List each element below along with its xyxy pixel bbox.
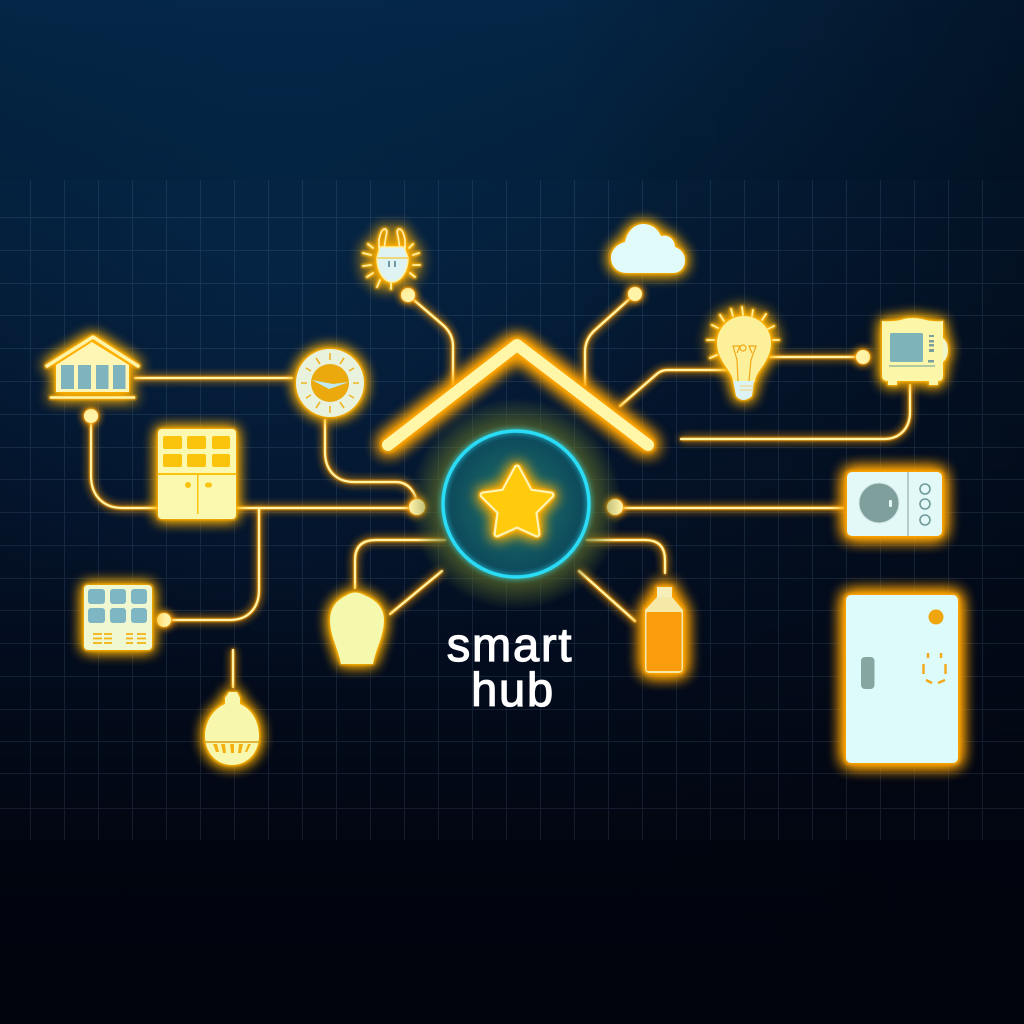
label: smart hub: smart: [447, 618, 573, 671]
connector lines: [91, 294, 910, 687]
icon: bottle: [645, 587, 683, 673]
icon: jar lamp: [330, 592, 384, 664]
hub ring: [443, 431, 589, 577]
icon: microwave oven: [882, 318, 948, 385]
icon: plug: [363, 229, 420, 289]
icon: star: [483, 468, 551, 534]
icon: washing machine: [847, 472, 942, 536]
label: smart hub: hub: [471, 663, 555, 716]
central hub: [410, 398, 622, 610]
icon: solar cabinet: [158, 429, 236, 519]
label: smart hub: [447, 618, 573, 716]
icon: pendant bulb: [205, 692, 259, 765]
icon: light bulb: [707, 307, 779, 400]
icon: house: [47, 337, 138, 398]
icon: control panel: [84, 585, 152, 650]
icon: cloud: [611, 224, 685, 273]
roof of smart home: [388, 345, 648, 445]
icon: gauge: [296, 349, 364, 417]
connector nodes: [84, 287, 870, 627]
icon: refrigerator: [846, 595, 958, 763]
